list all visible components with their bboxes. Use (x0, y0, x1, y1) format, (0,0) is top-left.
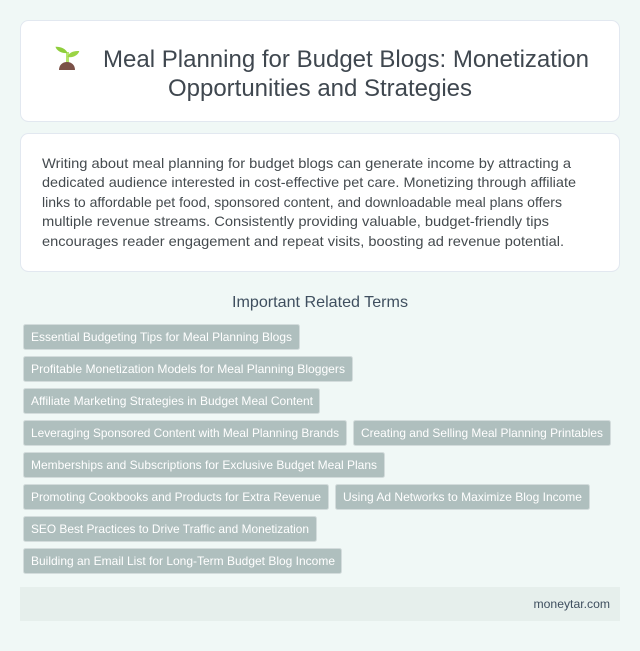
footer (20, 587, 620, 621)
tag: sponsored content (24, 420, 346, 446)
tag: printables (354, 420, 610, 446)
panel: intro text: encourages reader engagement and repeat visits, boosting ad revenue potential. (42, 233, 564, 249)
panel: intro text: links to affordable pet food, sponsored content, and downloadable meal plans offers (42, 194, 562, 210)
tag: monetization models: Profitable Monetization Models for Meal Planning Bloggers (31, 362, 345, 376)
tag: monetization models (24, 356, 352, 382)
tag: email list: Building an Email List for Long-Term Budget Blog Income (31, 554, 335, 568)
tag: cookbooks (24, 484, 328, 510)
tag: affiliate marketing (24, 388, 320, 414)
tag: cookbooks: Promoting Cookbooks and Products for Extra Revenue (31, 490, 321, 504)
panel: intro text (20, 134, 620, 272)
heading: related terms: Important Related Terms (232, 294, 408, 311)
tag: printables: Creating and Selling Meal Planning Printables (361, 426, 603, 440)
tag: memberships: Memberships and Subscriptions for Exclusive Budget Meal Plans (31, 458, 377, 472)
title (103, 46, 589, 102)
tag: ad networks (336, 484, 590, 510)
icon: sprout (56, 47, 79, 70)
title: Meal Planning for Budget Blogs: Monetization (103, 46, 589, 73)
tag: budgeting tips: Essential Budgeting Tips for Meal Planning Blogs (31, 330, 292, 344)
panel: title card (20, 20, 620, 122)
footer: moneytar.com (534, 597, 610, 611)
tag: sponsored content: Leveraging Sponsored Content with Meal Planning Brands (31, 426, 339, 440)
tag: ad networks: Using Ad Networks to Maximize Blog Income (343, 490, 582, 504)
panel: intro text: Writing about meal planning for budget blogs can generate income by attracting a (42, 155, 571, 171)
panel: intro text: dedicated audience interested in cost-effective pet care. Monetizing through affiliate (42, 174, 576, 190)
tag: budgeting tips (24, 324, 300, 350)
tag: memberships (24, 452, 384, 478)
tag: affiliate marketing: Affiliate Marketing Strategies in Budget Meal Content (31, 394, 314, 408)
tag: seo (24, 516, 316, 542)
tag: email list (24, 548, 342, 574)
tag: seo: SEO Best Practices to Drive Traffic and Monetization (31, 522, 309, 536)
panel: intro text: multiple revenue streams. Consistently providing valuable, budget-friendly tips (42, 213, 549, 229)
title: Opportunities and Strategies (168, 75, 472, 102)
